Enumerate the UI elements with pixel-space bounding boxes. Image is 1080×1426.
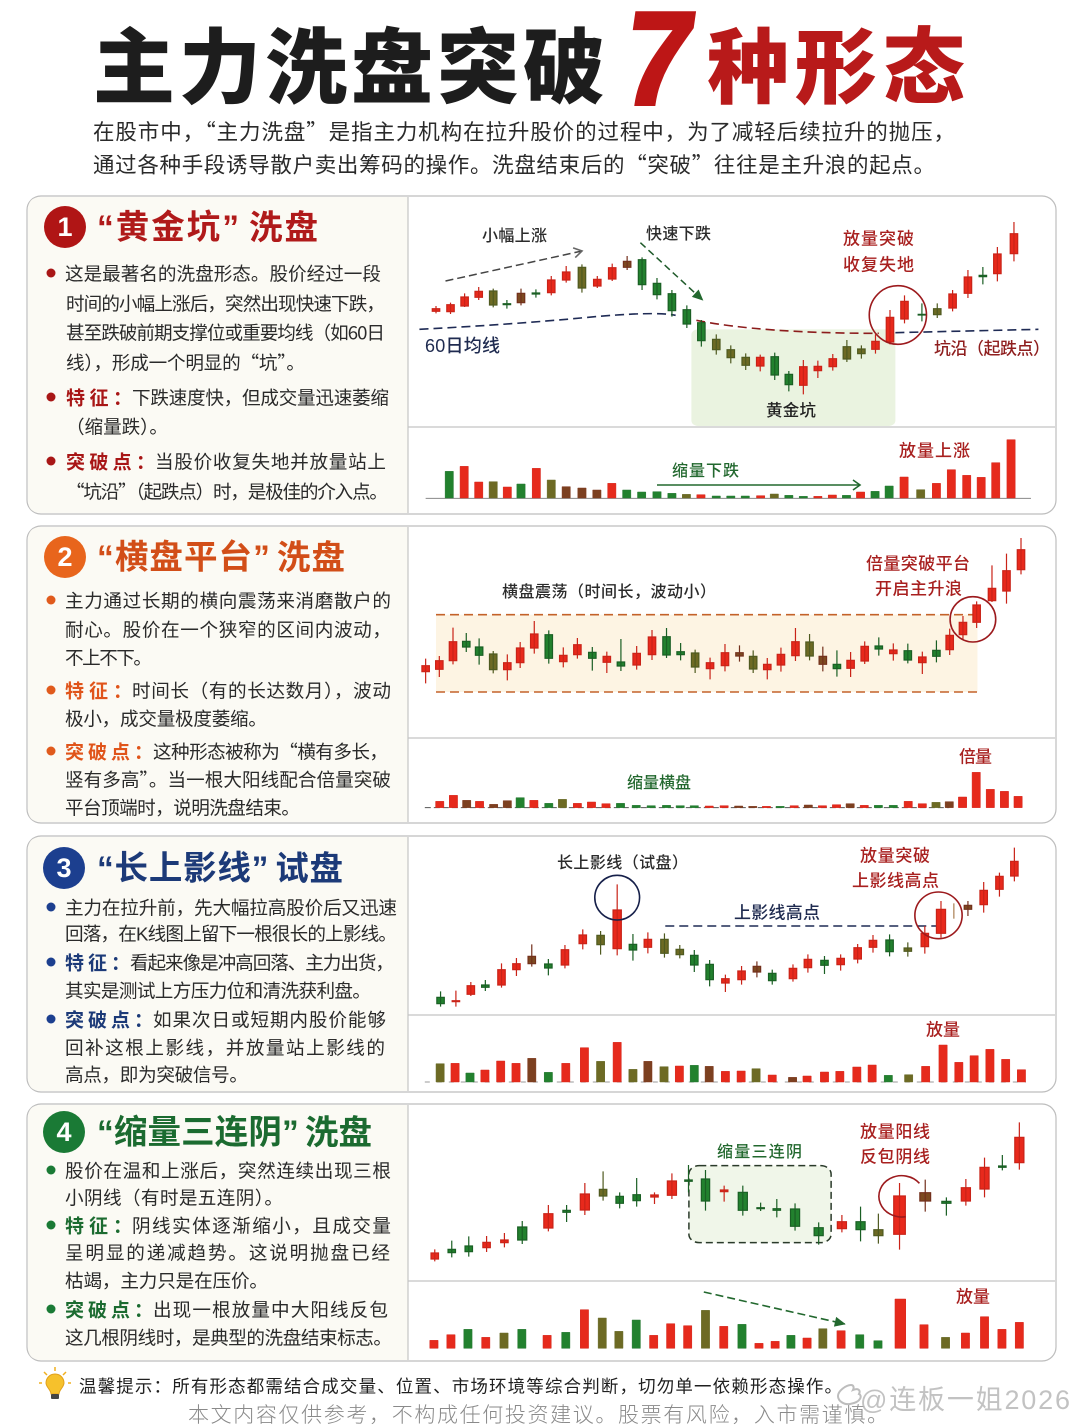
heading: “长上影线”试盘 xyxy=(97,850,343,888)
chart labels xyxy=(502,550,992,793)
text: description: 突破点： xyxy=(66,448,155,474)
text: description: 特征： xyxy=(65,1212,132,1238)
chart labels: 快速下跌 xyxy=(646,220,711,244)
text: description: 特征： xyxy=(65,948,130,976)
text: description: 耐心。股价在一个狭窄的区间内波动， xyxy=(65,616,391,642)
chart labels: 上影线高点 xyxy=(734,898,820,924)
text: description: 这是最著名的洗盘形态。股价经过一段 xyxy=(65,260,381,286)
chart labels xyxy=(425,220,1050,481)
footer tip: 温馨提示：所有形态都需结合成交量、位置、市场环境等综合判断，切勿单一依赖形态操作。 xyxy=(79,1374,842,1398)
text: description: “坑沿”（起跌点）时，是极佳的介入点。 xyxy=(66,478,388,504)
text: description: 呈明显的递减趋势。这说明抛盘已经 xyxy=(65,1238,390,1266)
candlestick chart xyxy=(430,1122,1024,1348)
chart labels: 上影线高点 xyxy=(852,866,939,892)
heading: “黄金坑” 洗盘 xyxy=(97,210,318,246)
text: description: 特征： xyxy=(65,676,132,704)
text: description: 突破点： xyxy=(65,1296,153,1322)
chart labels: 倍量突破平台 xyxy=(866,550,970,574)
candlestick chart xyxy=(422,538,1025,808)
text: description: 竖有多高”。当一根大阳线配合倍量突破 xyxy=(65,766,391,792)
panel: 横盘平台 xyxy=(27,526,1056,823)
text: description: 如果次日或短期内股价能够 xyxy=(153,1006,386,1032)
text: description: 时间长（有的长达数月），波动 xyxy=(132,676,391,704)
panel: 黄金坑 xyxy=(27,196,1056,514)
intro text xyxy=(93,116,955,180)
text: description: 主力通过长期的横向震荡来消磨散户的 xyxy=(65,586,391,614)
chart labels: 缩量横盘 xyxy=(627,769,691,793)
chart labels: 60日均线 xyxy=(425,336,500,356)
text: description: 回落，在K线图上留下一根很长的上影线。 xyxy=(65,924,397,944)
text: description: 阴线实体逐渐缩小，且成交量 xyxy=(132,1212,391,1238)
chart labels: 长上影线（试盘） xyxy=(557,849,688,873)
badge 4: 4 xyxy=(56,1117,72,1147)
text: description: 时间的小幅上涨后，突然出现快速下跌， xyxy=(66,290,385,316)
text: description: 出现一根放量中大阳线反包 xyxy=(153,1296,388,1322)
chart labels: 小幅上涨 xyxy=(482,222,547,246)
chart labels xyxy=(717,1118,990,1308)
text: description: 这种形态被称为“横有多长， xyxy=(153,738,388,764)
text: description: 小阴线（有时是五连阴）。 xyxy=(65,1184,283,1210)
text: description: 当股价收复失地并放量站上 xyxy=(155,448,386,474)
chart labels: 缩量下跌 xyxy=(672,457,739,481)
text: description: 高点，即为突破信号。 xyxy=(65,1060,248,1088)
text: description: 线），形成一个明显的“坑”。 xyxy=(66,348,305,376)
text: description xyxy=(46,1156,392,1350)
text: description: 平台顶端时，说明洗盘结束。 xyxy=(65,794,300,820)
chart labels: 倍量 xyxy=(959,742,992,768)
text: description: （缩量跌）。 xyxy=(66,412,168,440)
chart labels: 放量突破 xyxy=(843,224,914,250)
text: description xyxy=(46,586,391,820)
text: description: 极小，成交量极度萎缩。 xyxy=(65,704,267,732)
chart labels: 黄金坑 xyxy=(766,397,816,421)
chart labels: 收复失地 xyxy=(843,250,914,276)
candlestick chart xyxy=(425,848,1026,1082)
text: description: 特征： xyxy=(66,384,132,410)
title xyxy=(93,0,965,133)
text: description xyxy=(46,260,389,504)
watermark: @连板一姐2026 xyxy=(860,1385,1070,1415)
intro text: 在股市中，“主力洗盘”是指主力机构在拉升股价的过程中，为了减轻后续拉升的抛压， xyxy=(93,116,955,146)
chart labels: 坑沿（起跌点） xyxy=(934,334,1050,360)
chart labels: 反包阴线 xyxy=(860,1142,930,1168)
heading: “缩量三连阴”洗盘 xyxy=(97,1114,372,1152)
badge 1 xyxy=(44,206,86,248)
arrow: rise xyxy=(446,251,582,281)
chart labels: 缩量三连阴 xyxy=(717,1138,802,1162)
text: description: 甚至跌破前期支撑位或重要均线（如60日 xyxy=(66,318,385,346)
chart labels: 放量突破 xyxy=(860,842,930,866)
chart labels: 放量 xyxy=(956,1282,990,1308)
text: description: 这几根阴线时，是典型的洗盘结束标志。 xyxy=(65,1324,392,1350)
chart labels xyxy=(557,842,960,1040)
text: description: 枯竭，主力只是在压价。 xyxy=(65,1266,268,1294)
badge 3 xyxy=(43,847,85,889)
chart labels: 放量上涨 xyxy=(899,436,970,462)
text: description: 主力在拉升前，先大幅拉高股价后又迅速 xyxy=(65,894,397,920)
chart labels: 放量 xyxy=(926,1016,960,1040)
panel: 缩量三连阴 xyxy=(27,1104,1056,1361)
text: description: 看起来像是冲高回落、主力出货， xyxy=(130,948,394,976)
badge 2 xyxy=(44,536,86,578)
badge 1: 1 xyxy=(57,212,73,242)
chart labels: 开启主升浪 xyxy=(875,574,962,600)
text: description xyxy=(46,894,397,1088)
title: 种形态 xyxy=(707,2,965,120)
arrow: declining volume xyxy=(704,1292,845,1324)
chart labels: 放量阳线 xyxy=(860,1118,930,1142)
text: description: 股价在温和上涨后，突然连续出现三根 xyxy=(65,1156,391,1184)
heading: “横盘平台”洗盘 xyxy=(97,538,345,576)
badge 2: 2 xyxy=(57,542,73,572)
text: description: 突破点： xyxy=(65,1006,153,1032)
text: description: 不上不下。 xyxy=(65,644,152,670)
arrow: fall xyxy=(640,243,703,300)
icon: light bulb xyxy=(39,1367,71,1399)
title: 主力洗盘突破 xyxy=(93,2,605,120)
badge 4 xyxy=(43,1111,85,1153)
text: description: 回补这根上影线，并放量站上影线的 xyxy=(65,1034,385,1060)
candlestick chart xyxy=(419,222,1038,498)
chart labels: 横盘震荡（时间长，波动小） xyxy=(502,578,716,602)
text: description: 下跌速度快，但成交量迅速萎缩 xyxy=(132,384,389,410)
badge 3: 3 xyxy=(56,853,72,883)
text: description: 突破点： xyxy=(65,738,153,764)
intro text: 通过各种手段诱导散户卖出筹码的操作。洗盘结束后的“突破”往往是主升浪的起点。 xyxy=(93,148,935,180)
text: description: 其实是测试上方压力位和清洗获利盘。 xyxy=(65,976,371,1004)
panel: 长上影线 xyxy=(27,836,1056,1092)
arrow: shrinking volume xyxy=(657,484,860,486)
